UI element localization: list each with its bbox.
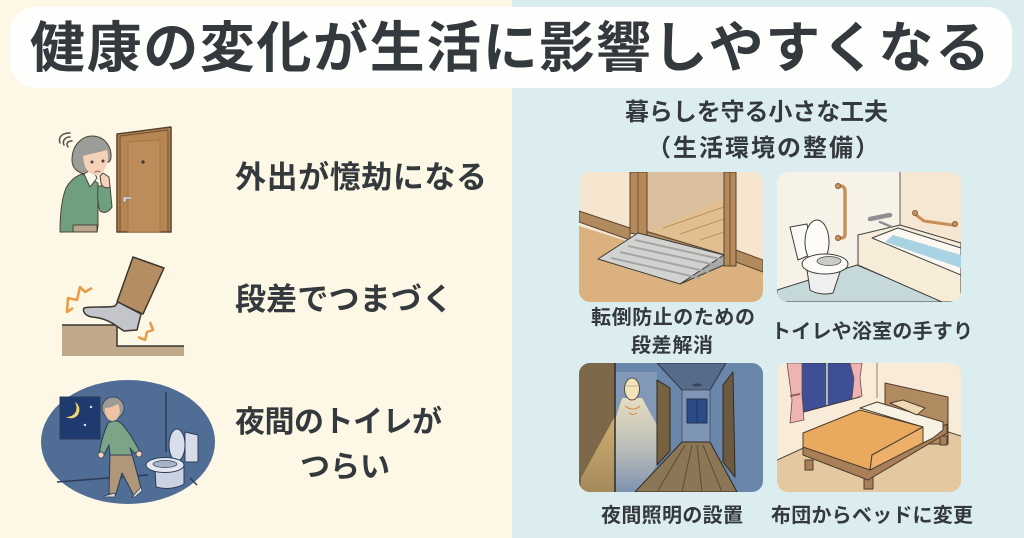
- icon: night toilet visit: [41, 380, 215, 504]
- heading: going out is a chore: 外出が憶劫になる: [235, 160, 487, 195]
- panel: living environment tips: [579, 99, 973, 527]
- icon: elderly person hesitating at door: [59, 127, 171, 232]
- illustration: bed: [777, 363, 961, 492]
- heading: tips for protecting daily life: （生活環境の整備）: [647, 135, 879, 162]
- illustration: corridor night light: [579, 363, 763, 492]
- heading: night toilet is hard: つらい: [300, 451, 390, 484]
- caption: installing night lighting: 夜間照明の設置: [601, 504, 743, 527]
- heading: night toilet is hard: [235, 405, 442, 484]
- caption: removing steps to prevent falls: 転倒防止のための: [591, 306, 755, 329]
- caption: toilet and bath handrails: トイレや浴室の手すり: [771, 320, 973, 343]
- left panel background: [0, 0, 512, 538]
- right panel background: [512, 0, 1024, 538]
- illustration: threshold ramp: [579, 172, 763, 302]
- caption: switch from futon to bed: 布団からベッドに変更: [771, 504, 973, 527]
- heading: tripping on steps: 段差でつまづく: [235, 282, 453, 317]
- heading: tips for protecting daily life: 暮らしを守る小さな工夫: [625, 99, 888, 126]
- icon: foot tripping on step: [62, 257, 184, 356]
- illustration: toilet and bath handrails: [777, 172, 961, 302]
- heading: night toilet is hard: 夜間のトイレが: [235, 405, 442, 439]
- title banner: 健康の変化が生活に影響しやすくなる: [30, 17, 990, 79]
- caption: removing steps to prevent falls: [591, 306, 755, 357]
- panel: health changes: [41, 127, 487, 504]
- caption: removing steps to prevent falls: 段差解消: [631, 334, 713, 357]
- heading: tips for protecting daily life: [625, 99, 888, 162]
